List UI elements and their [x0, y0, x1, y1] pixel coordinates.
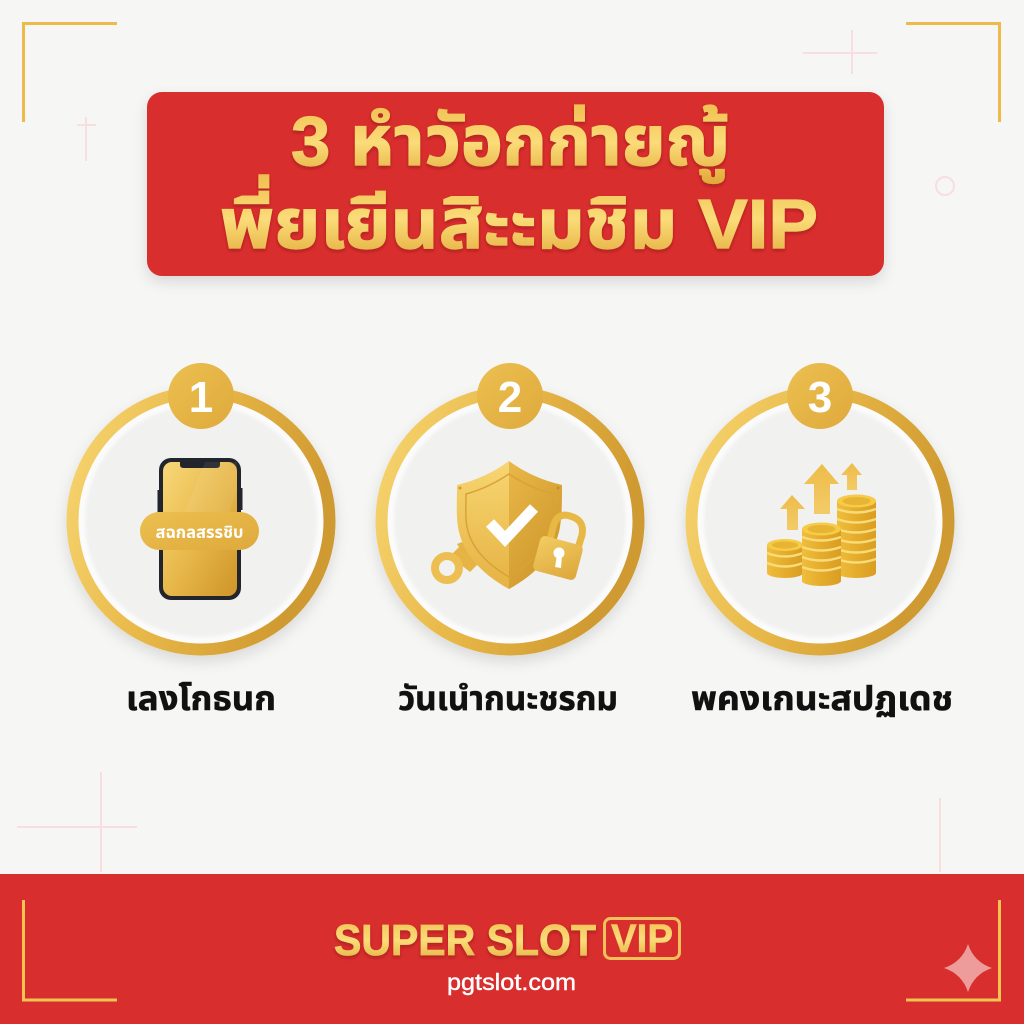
- step 2 circle: [382, 363, 638, 650]
- icon: key: [435, 542, 478, 580]
- icon: phone: สฉกลสรรชิบ: [156, 523, 244, 542]
- title banner: [147, 92, 884, 276]
- icon: sparkle: [944, 944, 992, 992]
- VIP badge: VIP: [611, 917, 673, 961]
- step 3 circle: [692, 363, 948, 650]
- icon: arrows: [780, 463, 862, 530]
- stack right: [837, 494, 876, 578]
- badge 2: [477, 363, 543, 429]
- corner frames bottom: [24, 900, 1000, 1000]
- badge 1: [168, 363, 234, 429]
- website: pgtslot.com: [447, 969, 576, 995]
- icon: padlock: [532, 515, 584, 581]
- label step 3: พคงเกนะสปฏเดช: [691, 680, 953, 718]
- badge 2: 2: [498, 373, 522, 422]
- title line 2: พี่ยเยีนสิะะมชิม VIP: [220, 175, 818, 263]
- corner frames top: [24, 24, 1000, 122]
- pill button: [140, 512, 259, 550]
- stack middle: [802, 522, 841, 586]
- label step 2: วันเนำกนะชรกม: [398, 680, 618, 718]
- footer band: [0, 874, 1024, 1024]
- badge 3: 3: [808, 373, 832, 422]
- label step 1: เลงโกธนก: [126, 680, 276, 718]
- title line 1: 3 หำวัอกก่ายญู้: [291, 102, 730, 183]
- icon: shield: [457, 461, 562, 589]
- stack left: [767, 539, 803, 578]
- brand name: SUPER SLOT: [334, 916, 596, 965]
- badge 3: [787, 363, 853, 429]
- decorative crosses: [17, 30, 954, 872]
- badge 1: 1: [189, 373, 213, 422]
- check mark: [490, 508, 534, 539]
- icon: phone: [140, 458, 259, 600]
- icon: coin stacks: [767, 494, 876, 586]
- step 1 circle: [72, 363, 330, 650]
